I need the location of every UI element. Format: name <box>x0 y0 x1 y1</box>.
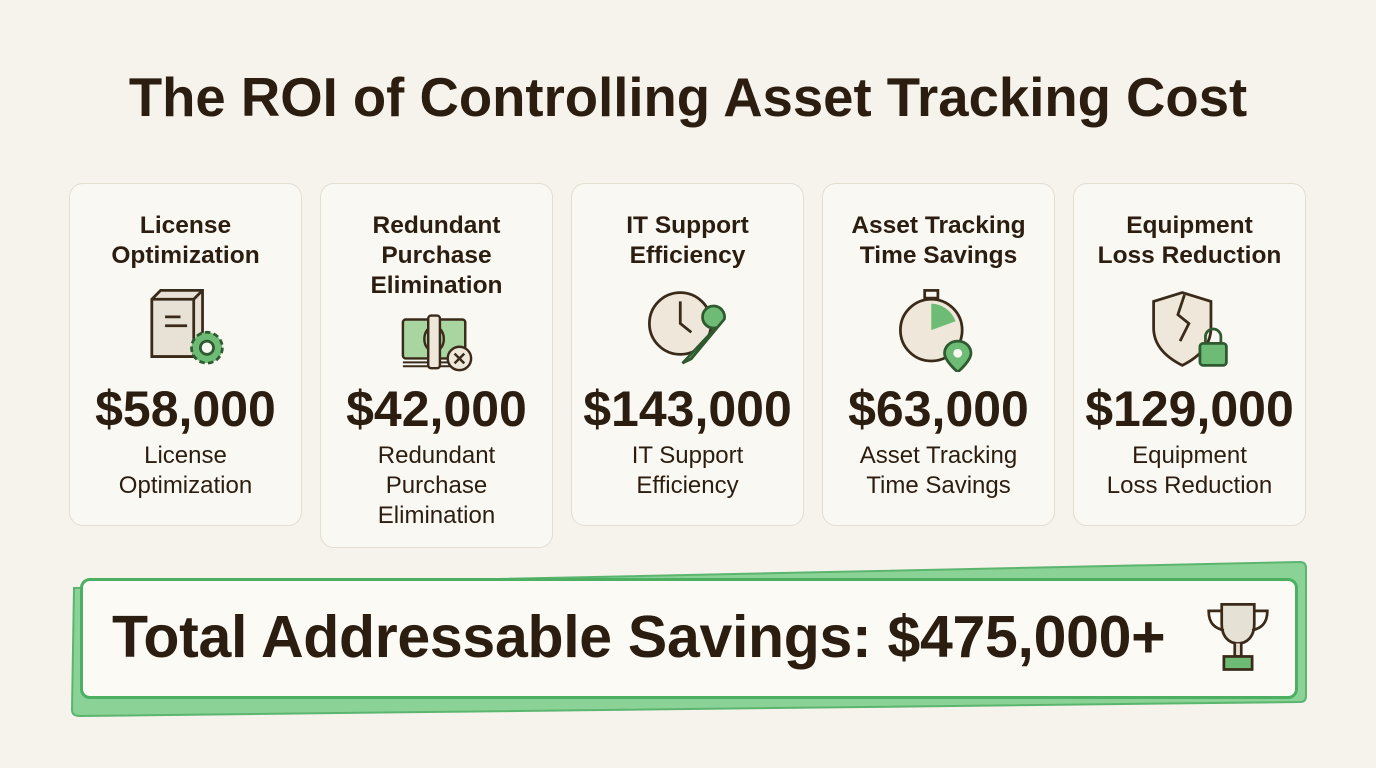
panel: redundant purchase: Redundant <box>373 212 500 239</box>
panel: IT support: IT Support <box>626 212 749 239</box>
panel: equipment loss: Loss Reduction <box>1107 472 1272 499</box>
panel: asset tracking time: Time Savings <box>860 242 1017 269</box>
title: The ROI of Controlling Asset Tracking Cost <box>129 67 1247 128</box>
panel: IT support <box>571 183 804 526</box>
icon: stopwatch with pin <box>899 289 972 372</box>
panel: IT support: Efficiency <box>636 472 739 499</box>
total text: Total Addressable Savings: $475,000+ <box>112 604 1165 670</box>
panel: redundant purchase: Purchase <box>381 242 492 269</box>
panel: redundant purchase <box>320 183 553 548</box>
icon: clock with wrench <box>648 291 726 364</box>
panel: redundant purchase: Elimination <box>370 272 503 299</box>
panel: asset tracking time: Asset Tracking <box>851 212 1026 239</box>
panel: asset tracking time: Asset Tracking <box>860 442 1017 469</box>
panel: redundant purchase: Purchase <box>386 472 487 499</box>
panel: equipment loss: $129,000 <box>1085 381 1294 437</box>
panel: asset tracking time <box>822 183 1055 526</box>
panel: IT support: Efficiency <box>630 242 745 269</box>
panel: IT support: IT Support <box>632 442 743 469</box>
icon: money stack with x <box>402 314 472 372</box>
panel: redundant purchase: Elimination <box>378 502 495 529</box>
panel: equipment loss <box>1073 183 1306 526</box>
panel: redundant purchase: $42,000 <box>346 381 527 437</box>
panel: license optimization: $58,000 <box>95 381 276 437</box>
panel: IT support: $143,000 <box>583 381 792 437</box>
icon: document with gear <box>150 289 224 364</box>
panel: license optimization: License <box>140 212 231 239</box>
panel: redundant purchase: Redundant <box>378 442 495 469</box>
panel: equipment loss: Loss Reduction <box>1098 242 1281 269</box>
panel: license optimization: License <box>144 442 227 469</box>
panel: equipment loss: Equipment <box>1126 212 1253 239</box>
icon: broken shield with lock <box>1152 291 1228 367</box>
icon: trophy <box>1207 603 1269 671</box>
panel: asset tracking time: $63,000 <box>848 381 1029 437</box>
panel: license optimization <box>69 183 302 526</box>
panel: license optimization: Optimization <box>111 242 260 269</box>
panel: asset tracking time: Time Savings <box>866 472 1011 499</box>
panel: license optimization: Optimization <box>119 472 252 499</box>
panel: equipment loss: Equipment <box>1132 442 1247 469</box>
total savings banner <box>71 561 1307 717</box>
